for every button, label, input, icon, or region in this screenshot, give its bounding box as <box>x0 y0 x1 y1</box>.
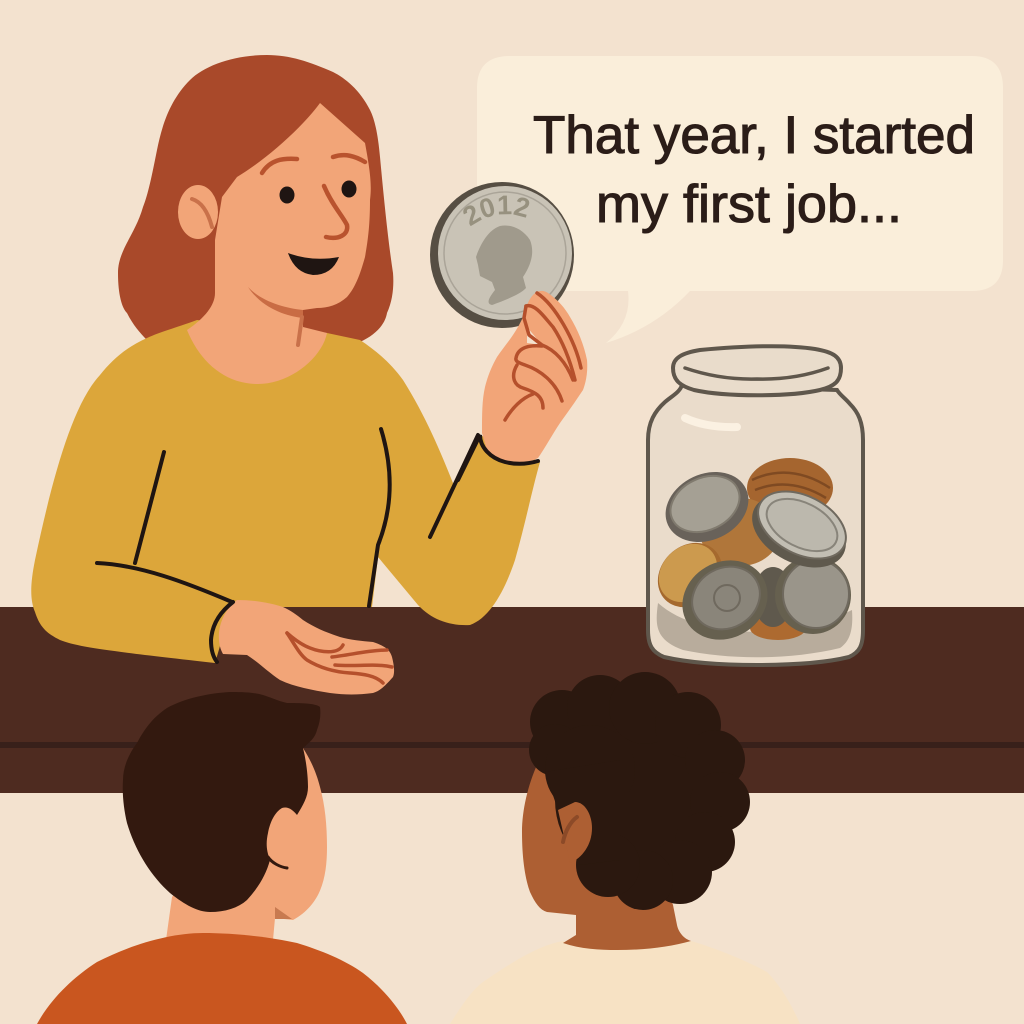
speech text: That year, I started <box>533 106 975 165</box>
jar floor <box>657 603 852 657</box>
coin portrait <box>476 226 532 305</box>
coin <box>430 182 574 328</box>
jar rim <box>673 346 841 395</box>
skin <box>522 765 691 950</box>
neck and face <box>166 748 327 940</box>
ear <box>558 802 592 863</box>
hair <box>123 692 320 912</box>
sweater lines <box>97 429 478 606</box>
raised hand <box>458 291 587 480</box>
bright coin <box>740 480 858 582</box>
speech bubble <box>477 56 1003 343</box>
gold coin <box>645 530 735 620</box>
sleeve cuff <box>211 602 233 662</box>
face and neck <box>187 103 371 384</box>
right child <box>450 672 800 1024</box>
counter <box>0 607 1024 793</box>
woman <box>31 55 540 663</box>
cuff <box>458 435 538 480</box>
coin: 2012 <box>463 196 530 226</box>
ear crease <box>268 857 287 868</box>
shirt <box>450 941 800 1024</box>
dark coin bottom <box>668 545 782 655</box>
ear <box>178 185 218 239</box>
silver coin upper left <box>654 459 760 555</box>
gray coin right <box>775 556 851 634</box>
curly hair <box>529 672 750 910</box>
mouth <box>288 253 339 275</box>
eyes <box>280 186 294 204</box>
shirt <box>37 933 407 1024</box>
jar <box>645 346 863 665</box>
coins in jar <box>645 458 858 655</box>
left child <box>37 692 407 1024</box>
lower hand <box>211 600 394 694</box>
neck shadow <box>248 287 303 318</box>
highlight <box>685 418 737 427</box>
hair <box>118 55 393 342</box>
sweater <box>31 320 540 663</box>
brows and nose <box>262 155 365 238</box>
speech text <box>533 106 975 234</box>
speech text: my first job... <box>596 175 902 234</box>
